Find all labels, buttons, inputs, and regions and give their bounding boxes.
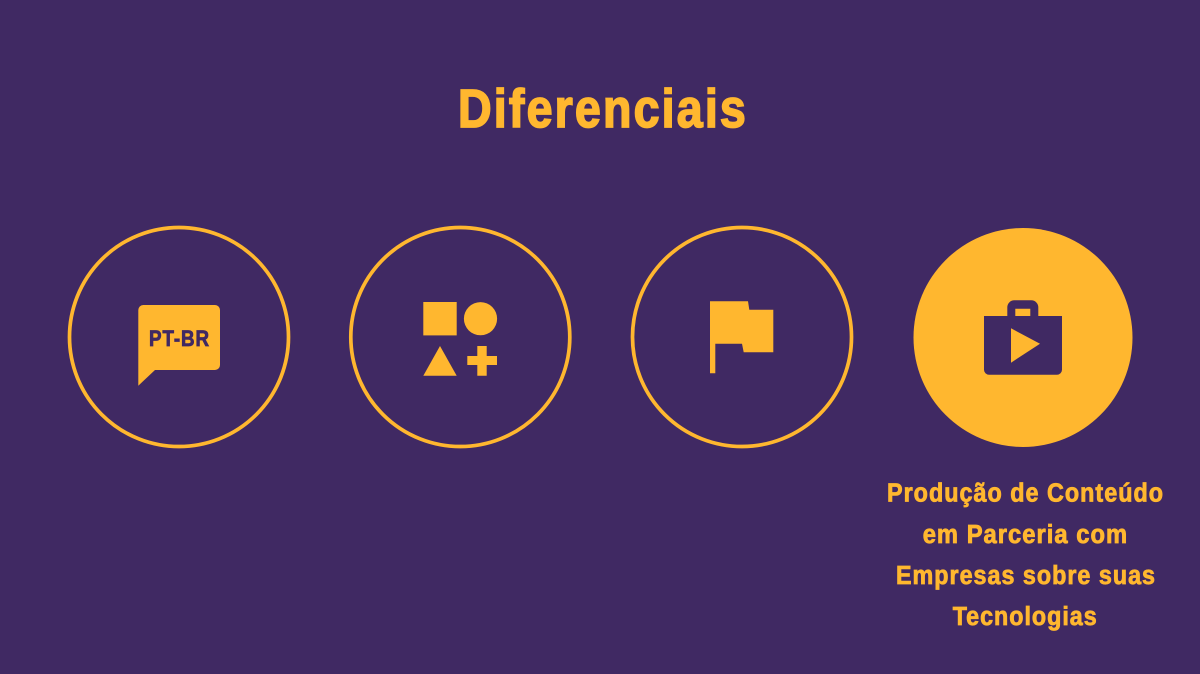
icon: flag bbox=[710, 301, 773, 373]
icon: square, circle, triangle and plus bbox=[423, 302, 497, 376]
text block: content production caption: Empresas sobre suas bbox=[896, 562, 1156, 590]
title: Diferenciais bbox=[458, 79, 748, 139]
text block: content production caption: em Parceria com bbox=[923, 521, 1128, 549]
icon: briefcase with play symbol bbox=[984, 300, 1062, 375]
panel: shapes bbox=[351, 228, 570, 446]
icon: speech bubble with PT-BR bbox=[138, 305, 220, 386]
text block: content production caption: Tecnologias bbox=[953, 603, 1098, 631]
text block: content production caption: Produção de Conteúdo bbox=[887, 480, 1164, 508]
icon: speech bubble with PT-BR: PT-BR bbox=[149, 326, 210, 351]
panel: flag bbox=[632, 228, 852, 446]
panel: PT-BR language bbox=[70, 228, 288, 446]
text block: content production caption bbox=[887, 480, 1164, 631]
panel: content production bbox=[914, 228, 1132, 447]
